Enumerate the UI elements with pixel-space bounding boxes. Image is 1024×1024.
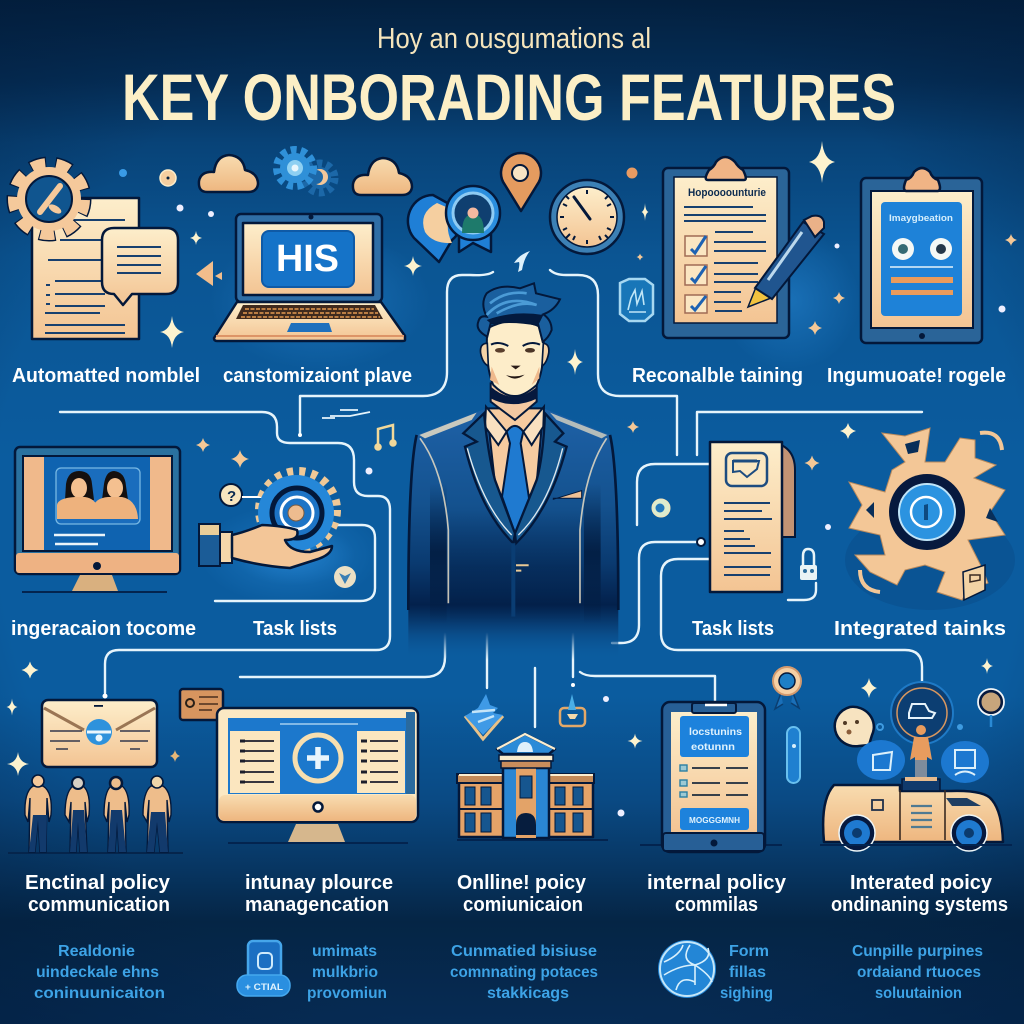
bottom heading labels: Onlline! poicy — [457, 872, 587, 894]
bottom heading labels — [25, 872, 1008, 916]
icon: map pin — [501, 153, 541, 211]
gear — [260, 472, 336, 548]
lapels — [463, 413, 515, 543]
checkboxes — [685, 236, 707, 313]
monitor stand — [72, 575, 118, 591]
clip — [706, 157, 746, 180]
bottom blue descriptions: umimats — [312, 943, 377, 960]
speech bubble — [102, 228, 178, 305]
title block — [122, 23, 896, 134]
cuff — [199, 524, 220, 566]
lightbulb bubble — [891, 682, 953, 744]
icon: small orange token — [626, 168, 638, 178]
bottom blue descriptions: mulkbrio — [312, 964, 378, 981]
monitor chin — [16, 553, 179, 573]
labels: row two: Integrated tainks — [834, 618, 1006, 640]
hand — [232, 525, 332, 568]
icon: laptop HIS: HIS — [276, 238, 339, 280]
bottom heading labels: Interated poicy — [850, 872, 993, 894]
clipboard title: Hopoooounturie — [688, 187, 766, 199]
laptop screen — [236, 214, 382, 302]
icon: hand holding gear — [199, 472, 356, 588]
tablet clip — [904, 168, 940, 191]
laptop base — [214, 302, 405, 341]
HIS button — [262, 231, 354, 287]
icon: tablet — [861, 168, 982, 343]
icon: clock — [550, 180, 624, 254]
person — [916, 725, 926, 735]
stand — [288, 824, 345, 842]
icon: tablet: Imaygbeation — [889, 213, 953, 224]
bottom blue descriptions: comnnating potaces — [450, 964, 598, 981]
bottom blue descriptions: stakkicags — [487, 985, 569, 1002]
labels: row one — [12, 365, 1006, 387]
wings — [459, 775, 593, 837]
icon: laptop HIS — [214, 214, 405, 341]
labels: row one: Reconalble taining — [632, 365, 803, 387]
labels: row two: Task lists — [692, 618, 774, 640]
gear — [14, 164, 84, 234]
icon: group of four people — [8, 775, 183, 853]
bottom heading labels: commilas — [675, 894, 758, 916]
icon: video monitor — [15, 447, 180, 592]
icon: glowing capsule — [787, 727, 800, 783]
tablet screen — [881, 202, 962, 316]
pediment — [497, 734, 555, 754]
icon: envelope — [42, 700, 157, 767]
icon: speech and badge — [408, 186, 500, 262]
labels: row one: canstomizaiont plave — [223, 365, 412, 387]
icon: document with fold — [710, 442, 795, 592]
hair — [478, 283, 560, 342]
plus — [295, 735, 341, 781]
bottom heading labels: Enctinal policy — [25, 872, 171, 894]
bottom blue descriptions: soluutainion — [875, 985, 962, 1002]
icon: tag card — [180, 689, 223, 720]
labels: row one: Automatted nomblel — [12, 365, 200, 387]
icon: mobile tablet with form: MOGGGMNH — [689, 815, 740, 825]
icon: small swoosh — [514, 251, 530, 272]
icon: padlock — [800, 549, 817, 580]
blue blobs — [857, 740, 905, 780]
labels: row two: Task lists — [253, 618, 337, 640]
shirt — [487, 408, 543, 537]
bottom blue descriptions: coninuunicaiton — [34, 985, 165, 1002]
head — [487, 321, 544, 396]
truck body — [823, 785, 1003, 842]
form footer — [680, 808, 749, 830]
bottom heading labels: ondinaning systems — [831, 894, 1008, 916]
bottom blue descriptions: fillas — [729, 964, 766, 981]
clipboard board — [663, 168, 789, 338]
chin — [219, 795, 416, 821]
icon: magnifier token — [978, 689, 1004, 727]
icon: small music note — [376, 425, 396, 450]
speech bubble — [835, 707, 874, 746]
bottom blue descriptions — [34, 943, 983, 1002]
icon: small circular emblem — [652, 499, 670, 517]
wheels — [839, 815, 875, 851]
icon: blue hand badge — [620, 279, 653, 321]
centre block — [503, 768, 549, 838]
bottom blue descriptions: Form — [729, 943, 769, 960]
icon: hand holding gear: ? — [227, 488, 236, 505]
bottom heading labels: internal policy — [647, 872, 787, 894]
icon: cloud right — [353, 158, 412, 195]
icon: truck with person and bubbles — [820, 682, 1012, 851]
icon: blue globe — [658, 940, 716, 998]
video participants — [56, 468, 140, 524]
bottom heading labels: communication — [28, 894, 170, 916]
icon: small signal glyph — [322, 410, 370, 418]
central figure: man in suit — [408, 283, 618, 660]
icon: desktop monitor with plus — [217, 708, 418, 843]
bottom heading labels: intunay plource — [245, 872, 393, 894]
suit body — [408, 408, 618, 660]
question bubble — [220, 484, 242, 506]
bottom blue descriptions: provomiun — [307, 985, 387, 1002]
bottom blue descriptions: ordaiand rtuoces — [857, 964, 981, 981]
labels: row two — [11, 618, 1006, 640]
icon: small tray — [560, 694, 585, 726]
bottom blue descriptions: sighing — [720, 985, 773, 1002]
bottom blue descriptions: Cunmatied bisiuse — [451, 943, 597, 960]
ears — [480, 343, 549, 366]
icon: cloud left — [199, 155, 258, 192]
icon: government building — [457, 734, 608, 840]
icon: award medal — [773, 667, 801, 709]
pocket square — [553, 491, 582, 499]
bottom blue descriptions: Cunpille purpines — [852, 943, 983, 960]
shoulder highlights — [419, 413, 477, 438]
tie — [502, 426, 529, 533]
eyes and brows — [491, 343, 540, 346]
icon: mobile tablet with form — [640, 702, 782, 852]
sleeve shading — [430, 483, 447, 623]
bottom blue descriptions: uindeckale ehns — [36, 964, 159, 981]
subtitle: Hoy an ousgumations al — [377, 23, 651, 55]
pen — [748, 216, 824, 307]
icon: blue gears — [278, 151, 334, 192]
icon: small cream disc — [160, 170, 176, 186]
decorative sparkles and dots — [6, 141, 1017, 816]
icon: large cog with blue center — [849, 428, 1005, 600]
list panels — [230, 731, 280, 793]
shield token — [334, 566, 356, 588]
neck — [491, 383, 537, 420]
bottom blue descriptions: Realdonie — [58, 943, 135, 960]
icon: gear with document and speech bubble — [14, 164, 178, 339]
labels: row two: ingeracaion tocome — [11, 618, 196, 640]
icon: clipboard checklist — [663, 157, 824, 338]
icon: mobile tablet with form: locstunins — [689, 727, 742, 738]
icon: mobile tablet with form: eotunnn — [691, 742, 735, 753]
bottom heading labels: managencation — [245, 894, 389, 916]
icon: blue device: + CTIAL — [245, 982, 283, 993]
labels: row one: Ingumuoate! rogele — [827, 365, 1006, 387]
icon: blue device — [237, 941, 290, 996]
bottom heading labels: comiunicaion — [463, 894, 583, 916]
icon: left arrow — [196, 261, 222, 286]
connector lines — [60, 270, 922, 727]
form header — [680, 716, 749, 757]
document — [32, 198, 139, 339]
form rows — [680, 765, 687, 797]
icon: blue gem — [465, 694, 503, 739]
